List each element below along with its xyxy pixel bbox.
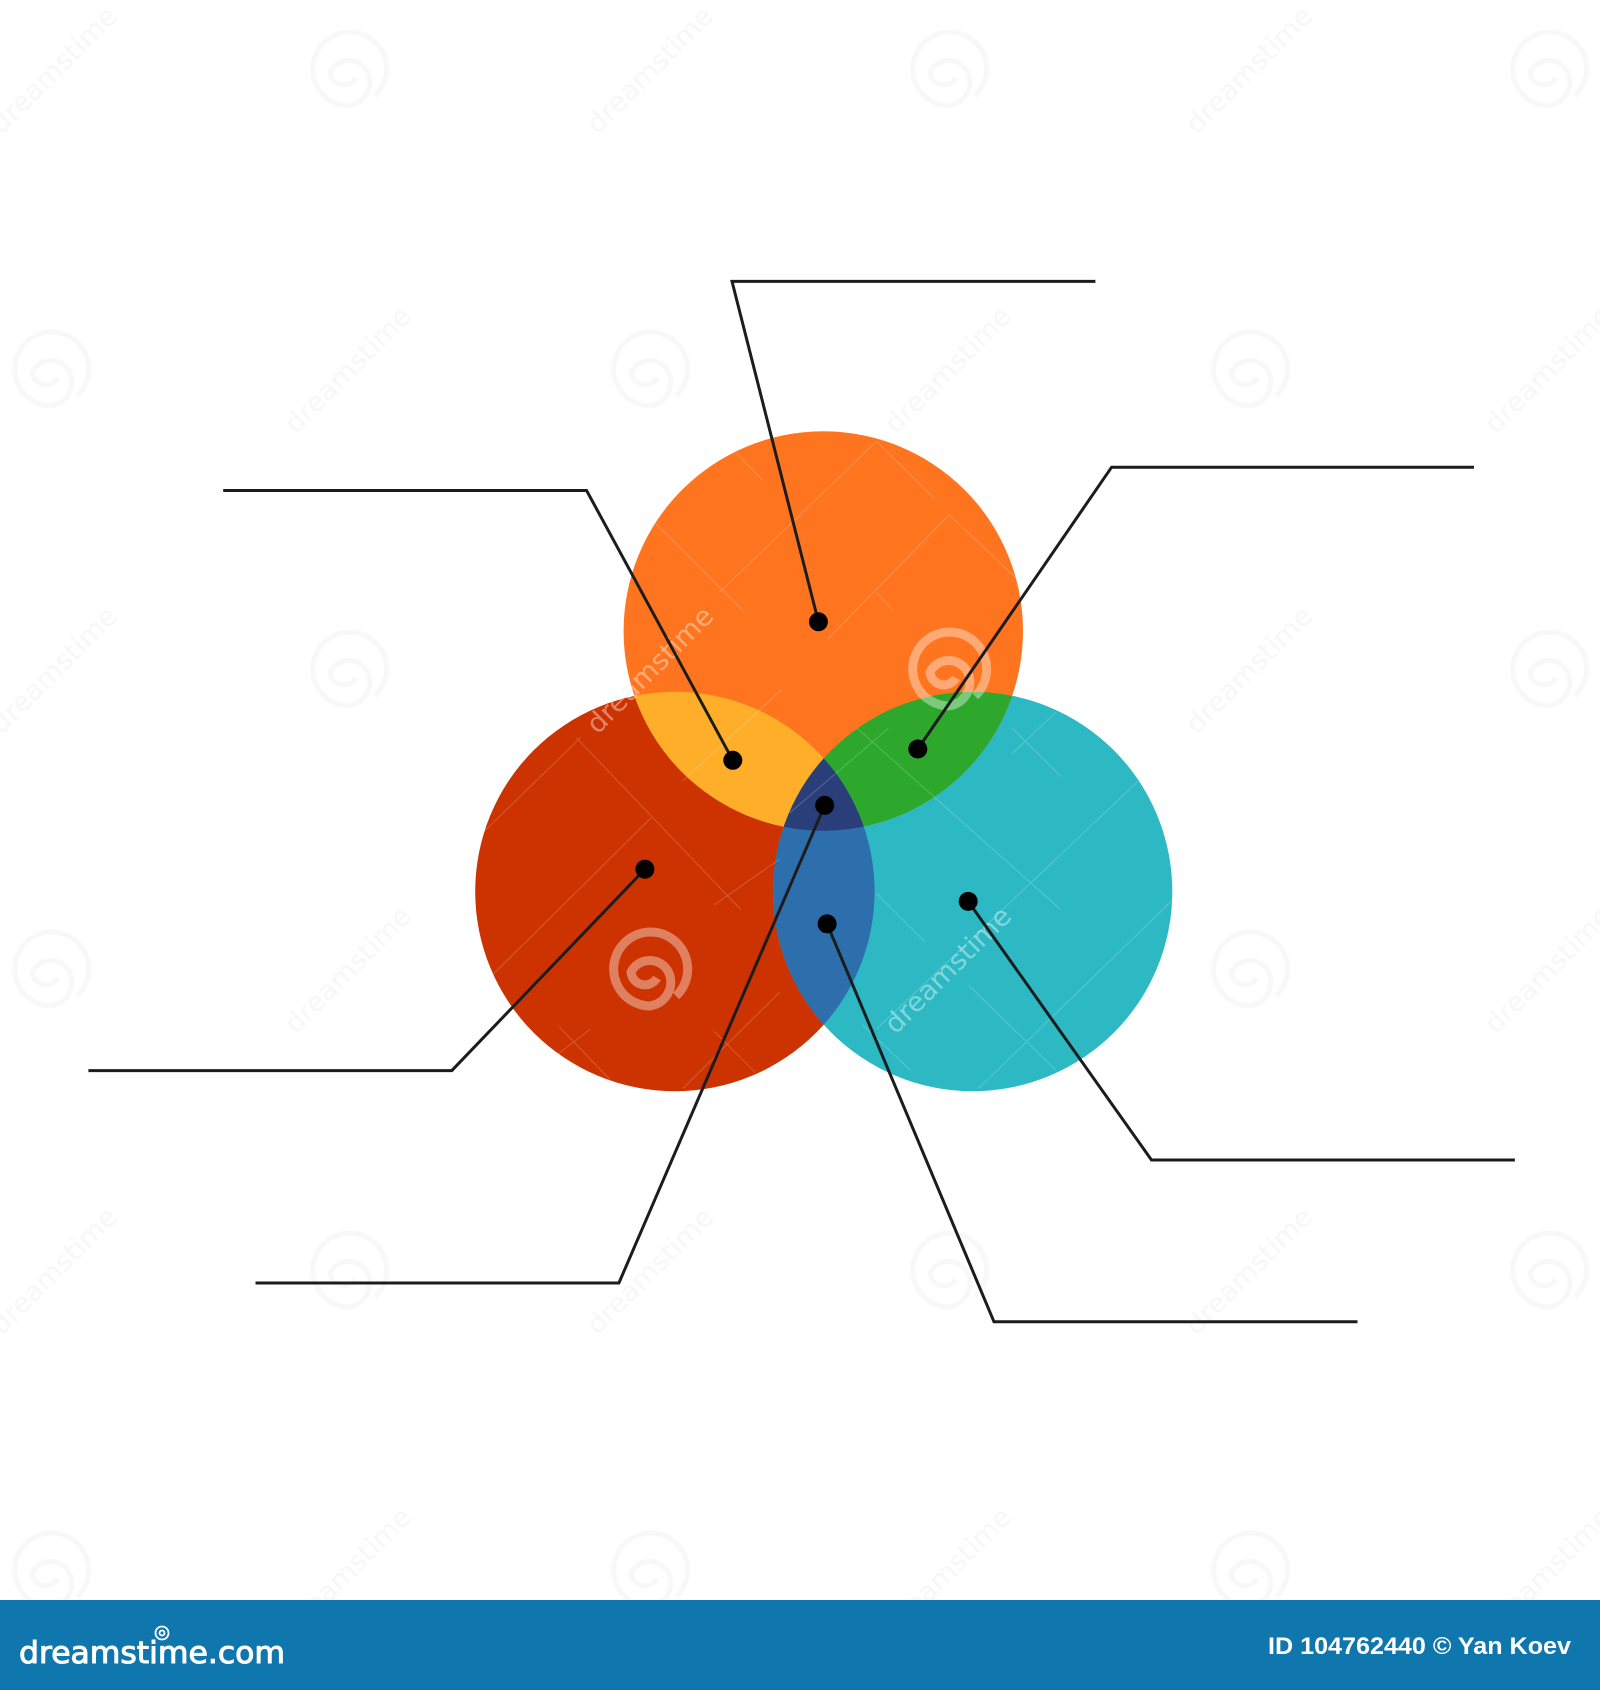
overlap: green, orange and teal bbox=[784, 692, 1012, 827]
footer logo spiral bbox=[156, 1626, 168, 1640]
white watermark over circles: dreamstime bbox=[879, 901, 1018, 1040]
faint watermark pattern: dreamstime bbox=[581, 601, 720, 740]
leader: orange and teal overlap bbox=[908, 467, 1474, 758]
faint watermark pattern: dreamstime bbox=[1180, 1202, 1319, 1341]
faint watermark pattern: dreamstime bbox=[879, 301, 1018, 440]
leader: top circle bbox=[732, 281, 1095, 631]
leader: red and teal overlap bbox=[818, 914, 1358, 1322]
overlap: navy, all three circles bbox=[784, 758, 864, 831]
faint watermark pattern: dreamstime bbox=[879, 901, 1018, 1040]
venn diagram bbox=[475, 431, 1172, 1091]
footer bar bbox=[0, 1600, 1600, 1690]
leader: orange and red overlap bbox=[223, 490, 742, 770]
white watermark over circles: dreamstime bbox=[581, 601, 720, 740]
overlap: yellow, orange and red bbox=[634, 692, 824, 827]
faint watermark pattern: dreamstime bbox=[1180, 1, 1319, 140]
leader: red circle bbox=[88, 860, 654, 1071]
overlap: blue, red and teal bbox=[772, 758, 875, 1025]
footer logo text: dreamstime.com bbox=[19, 1636, 285, 1671]
footer image id: ID 104762440 © Yan Koev bbox=[1268, 1633, 1572, 1660]
faint watermark pattern: dreamstime bbox=[279, 1502, 418, 1641]
circle: red, bottom left bbox=[475, 692, 875, 1091]
faint watermark pattern: dreamstime bbox=[279, 901, 418, 1040]
faint watermark pattern: dreamstime bbox=[879, 1502, 1018, 1641]
faint watermark pattern: dreamstime bbox=[581, 1202, 720, 1341]
circle: orange, top bbox=[624, 431, 1023, 831]
leader: centre overlap bbox=[256, 796, 834, 1283]
faint watermark pattern: dreamstime bbox=[279, 301, 418, 440]
circle: teal, bottom right bbox=[773, 692, 1172, 1091]
faint watermark pattern: dreamstime bbox=[1180, 601, 1319, 740]
leader: teal circle bbox=[959, 892, 1515, 1160]
white watermark over circles bbox=[484, 441, 1172, 1089]
faint watermark pattern: dreamstime bbox=[581, 1, 720, 140]
